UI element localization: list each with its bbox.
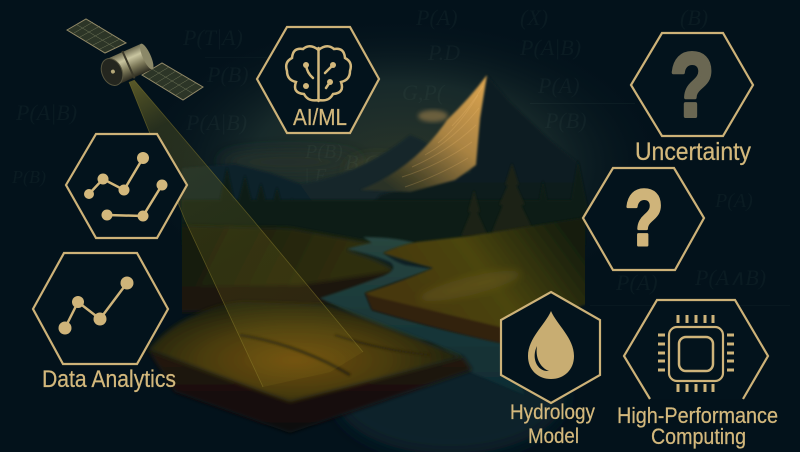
- High-Performance Computing hexagon: [624, 300, 768, 399]
- terrain, clipped to the painted panel: [148, 215, 600, 433]
- faint Bayes formulas: (X): [520, 5, 548, 30]
- icon: two line charts: [84, 152, 168, 222]
- night sky with glow: [120, 0, 680, 330]
- icon: faded question mark: ?: [670, 35, 714, 136]
- faint Bayes formulas: G,P(: [402, 80, 446, 105]
- upper analytics hexagon: [66, 134, 187, 238]
- label: Hydrology Model: Model: [528, 425, 579, 448]
- forest: [182, 160, 590, 245]
- icon: processor chip: [658, 315, 734, 392]
- mountain shadow face: [345, 75, 590, 238]
- label: High-Performance Computing: High-Performance: [617, 403, 778, 428]
- faint Bayes formulas: P(T|A): [182, 25, 243, 50]
- right land cliff: [365, 294, 500, 344]
- AI/ML hexagon: [257, 27, 379, 133]
- back hills: [182, 135, 455, 240]
- icon: water drop: [528, 311, 574, 379]
- faint Bayes formulas: P(B): [11, 167, 46, 188]
- icon: line chart: [58, 276, 134, 334]
- faint Bayes formulas: P(B): [304, 141, 343, 163]
- faint Bayes formulas: P(A∧B): [694, 265, 766, 290]
- label: Data Analytics: Data Analytics: [42, 366, 176, 393]
- river: [320, 237, 525, 395]
- satellite: [67, 19, 203, 100]
- faint Bayes formulas: P(A|B): [15, 100, 77, 125]
- faint Bayes formulas: P.D: [427, 40, 460, 65]
- faint Bayes formulas: P(B): [544, 108, 587, 133]
- icon: question mark: ?: [625, 174, 663, 263]
- faint Bayes formulas: [11, 5, 790, 306]
- label: AI/ML: AI/ML: [293, 104, 347, 130]
- plateau surface: [148, 302, 463, 402]
- label: Uncertainty: Uncertainty: [635, 138, 751, 166]
- icon: brain: [286, 46, 351, 101]
- faint Bayes formulas: B C: [345, 150, 379, 175]
- label: High-Performance Computing: Computing: [651, 424, 746, 449]
- solar panel upper: [67, 19, 126, 53]
- large pine trees: [461, 163, 534, 294]
- satellite sensor beam: [129, 80, 363, 387]
- faint Bayes formulas: P(A|B): [185, 110, 247, 135]
- mountain: [345, 75, 590, 238]
- label: Hydrology Model: [510, 401, 595, 448]
- question mark hexagon: [583, 168, 704, 270]
- Data Analytics hexagon: [33, 253, 168, 364]
- label: High-Performance Computing: [617, 403, 778, 449]
- faint Bayes formulas: P(A): [714, 190, 753, 212]
- Uncertainty hexagon: [631, 33, 753, 136]
- faint Bayes formulas: P(B): [206, 62, 249, 87]
- faint Bayes formulas: | E: [304, 165, 327, 187]
- solar panel lower: [142, 63, 203, 100]
- faint Bayes formulas: P(B): [351, 190, 394, 215]
- mountain sunlit face: [360, 75, 487, 192]
- foreground plateau: [148, 302, 472, 433]
- right land: [365, 215, 600, 343]
- Hydrology Model hexagon: [501, 292, 600, 403]
- satellite body: [97, 41, 156, 90]
- dark water glow: [335, 335, 565, 452]
- label: Hydrology Model: Hydrology: [510, 401, 595, 424]
- left land: [160, 225, 393, 312]
- sunlit brush streaks: [402, 86, 483, 187]
- faint Bayes formulas: (B): [680, 5, 708, 30]
- faint Bayes formulas: P(A): [415, 5, 458, 30]
- plateau side: [148, 350, 472, 433]
- left land cliff: [160, 271, 393, 312]
- faint Bayes formulas: P(A): [615, 270, 658, 295]
- faint Bayes formulas: P(A): [537, 73, 580, 98]
- faint Bayes formulas: P(A|B): [519, 35, 581, 60]
